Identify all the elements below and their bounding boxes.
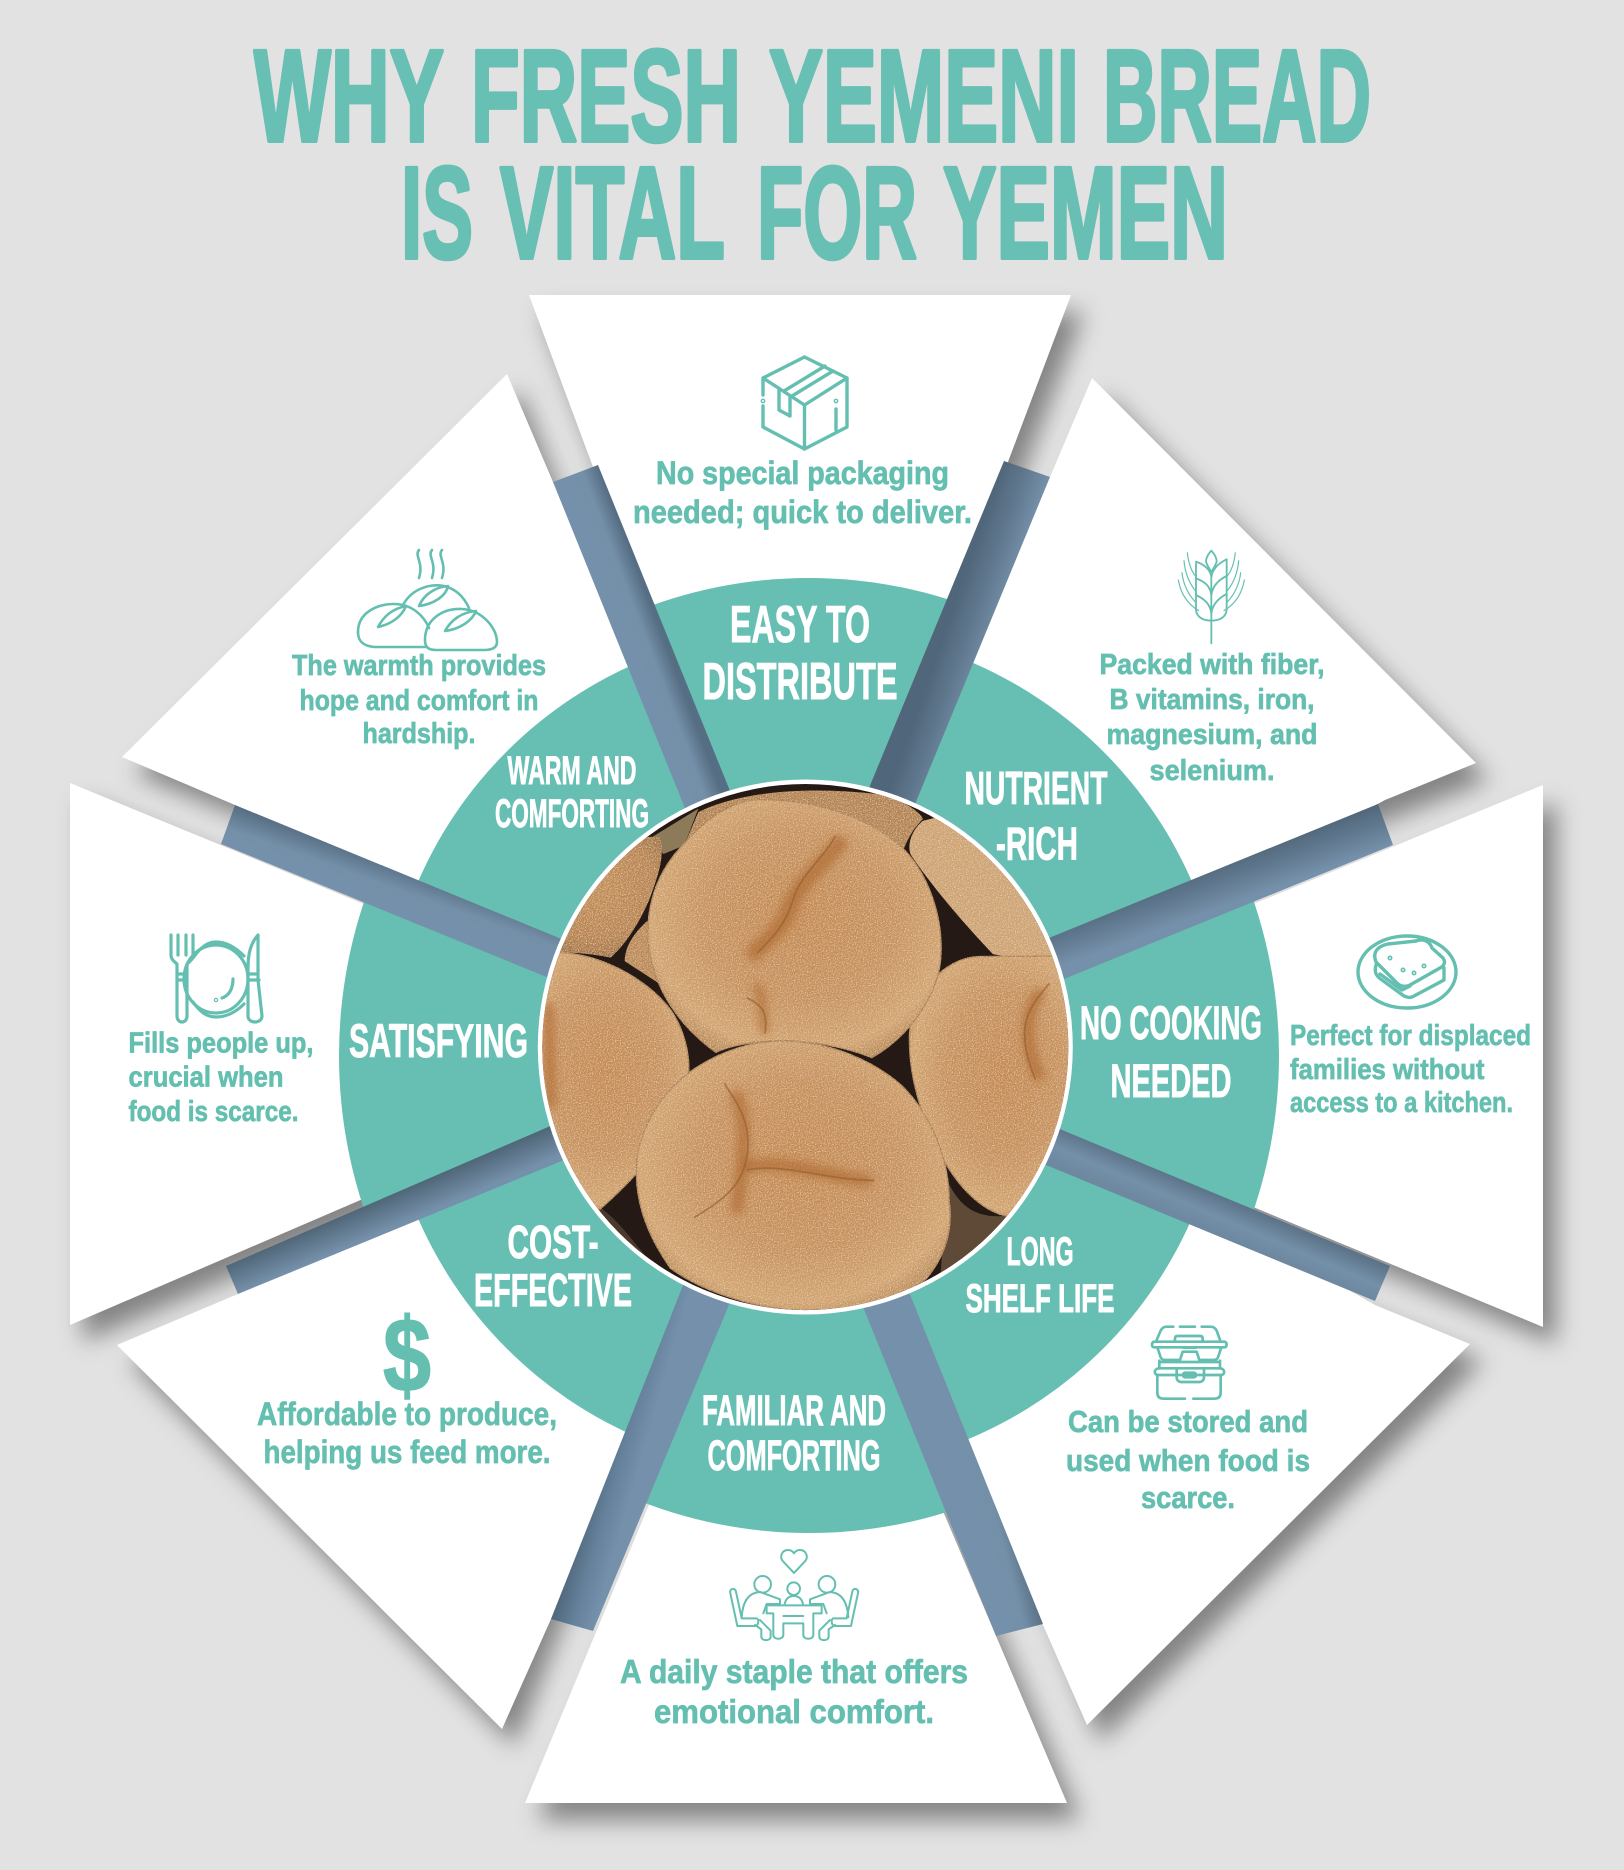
description: Fills people up, bbox=[128, 1028, 314, 1060]
description bbox=[1066, 1404, 1310, 1515]
heading: cost-effective: COST- bbox=[508, 1216, 598, 1268]
title: YEMENI bbox=[769, 22, 1079, 169]
heading: easy to distribute: DISTRIBUTE bbox=[702, 653, 898, 711]
description: emotional comfort. bbox=[654, 1693, 934, 1730]
panel shadows bbox=[83, 312, 1556, 1820]
heading: familiar and comforting: COMFORTING bbox=[708, 1432, 880, 1480]
description bbox=[1100, 649, 1324, 787]
blue divider bars bbox=[221, 461, 1393, 1636]
heading: easy to distribute bbox=[702, 596, 898, 711]
heading: long shelf life: SHELF LIFE bbox=[966, 1277, 1114, 1321]
heading: warm and comforting: COMFORTING bbox=[495, 792, 649, 836]
icon: food container bbox=[1152, 1327, 1227, 1399]
description: food is scarce. bbox=[128, 1096, 298, 1128]
heading: satisfying: SATISFYING bbox=[349, 1014, 528, 1067]
title: WHY bbox=[254, 22, 444, 169]
heading: warm and comforting: WARM AND bbox=[508, 749, 636, 793]
heading: long shelf life bbox=[966, 1230, 1114, 1321]
description: No special packaging bbox=[656, 455, 949, 491]
description: The warmth provides bbox=[292, 650, 546, 682]
heading: long shelf life: LONG bbox=[1006, 1230, 1074, 1274]
heading: nutrient-rich: -RICH bbox=[996, 818, 1078, 870]
icon: sandwich bbox=[1358, 936, 1456, 1008]
description: A daily staple that offers bbox=[620, 1653, 968, 1690]
description: crucial when bbox=[128, 1062, 284, 1094]
panel: nutrient-rich bbox=[835, 378, 1476, 1020]
description: access to a kitchen. bbox=[1290, 1087, 1513, 1119]
description: Perfect for displaced bbox=[1290, 1020, 1531, 1052]
description bbox=[633, 455, 972, 530]
description: scarce. bbox=[1141, 1480, 1235, 1515]
heading: no cooking needed bbox=[1080, 996, 1262, 1107]
panel: cost-effective bbox=[117, 1085, 755, 1729]
photo: bread rolls bbox=[538, 780, 1073, 1314]
heading: familiar and comforting: FAMILIAR AND bbox=[702, 1387, 886, 1435]
teal inner disc for the diagonal segments bbox=[383, 628, 1227, 1472]
description: magnesium, and bbox=[1106, 719, 1318, 751]
panel: satisfying bbox=[70, 783, 714, 1325]
panel: warm and comforting bbox=[122, 374, 762, 1018]
description: B vitamins, iron, bbox=[1110, 684, 1314, 716]
description: used when food is bbox=[1066, 1443, 1310, 1478]
description bbox=[1290, 1020, 1531, 1119]
description: Affordable to produce, bbox=[257, 1396, 557, 1432]
icon: plate and cutlery bbox=[171, 935, 262, 1022]
teal outer disc for the four cardinal segments bbox=[339, 578, 1279, 1533]
panel: familiar and comforting bbox=[525, 1158, 1067, 1803]
headings bbox=[349, 596, 1262, 1480]
heading: warm and comforting bbox=[495, 749, 649, 836]
heading: nutrient-rich bbox=[964, 762, 1108, 870]
icon: warm bread rolls bbox=[358, 550, 497, 650]
description: Packed with fiber, bbox=[1100, 649, 1324, 681]
description: helping us feed more. bbox=[264, 1434, 550, 1470]
title: IS bbox=[401, 139, 473, 286]
description bbox=[620, 1653, 968, 1730]
description: families without bbox=[1290, 1054, 1485, 1086]
icon: dollar sign: $ bbox=[383, 1297, 431, 1414]
description: needed; quick to deliver. bbox=[633, 494, 972, 530]
title: FOR bbox=[757, 139, 917, 286]
description: hope and comfort in bbox=[300, 685, 538, 717]
description: selenium. bbox=[1150, 755, 1274, 787]
heading: no cooking needed: NEEDED bbox=[1110, 1054, 1232, 1107]
description: hardship. bbox=[362, 718, 476, 750]
description bbox=[128, 1028, 314, 1128]
heading: easy to distribute: EASY TO bbox=[730, 596, 870, 654]
panel: no cooking needed bbox=[886, 785, 1543, 1327]
title: BREAD bbox=[1103, 22, 1371, 169]
heading: nutrient-rich: NUTRIENT bbox=[964, 762, 1108, 814]
heading: cost-effective: EFFECTIVE bbox=[474, 1264, 632, 1316]
icon: wheat bbox=[1178, 551, 1244, 643]
title: YEMEN bbox=[943, 139, 1228, 286]
panel: long shelf life bbox=[835, 1085, 1470, 1725]
title bbox=[254, 22, 1371, 286]
panel: easy to distribute bbox=[529, 295, 1071, 1018]
heading: cost-effective bbox=[474, 1216, 632, 1316]
description bbox=[292, 650, 546, 750]
heading: no cooking needed: NO COOKING bbox=[1080, 996, 1262, 1049]
heading: familiar and comforting bbox=[702, 1387, 886, 1480]
description bbox=[257, 1396, 557, 1470]
description: Can be stored and bbox=[1068, 1404, 1308, 1439]
title: VITAL bbox=[500, 139, 725, 286]
icon: box bbox=[762, 357, 847, 449]
title: FRESH bbox=[471, 22, 741, 169]
icon: family at table bbox=[730, 1550, 858, 1640]
